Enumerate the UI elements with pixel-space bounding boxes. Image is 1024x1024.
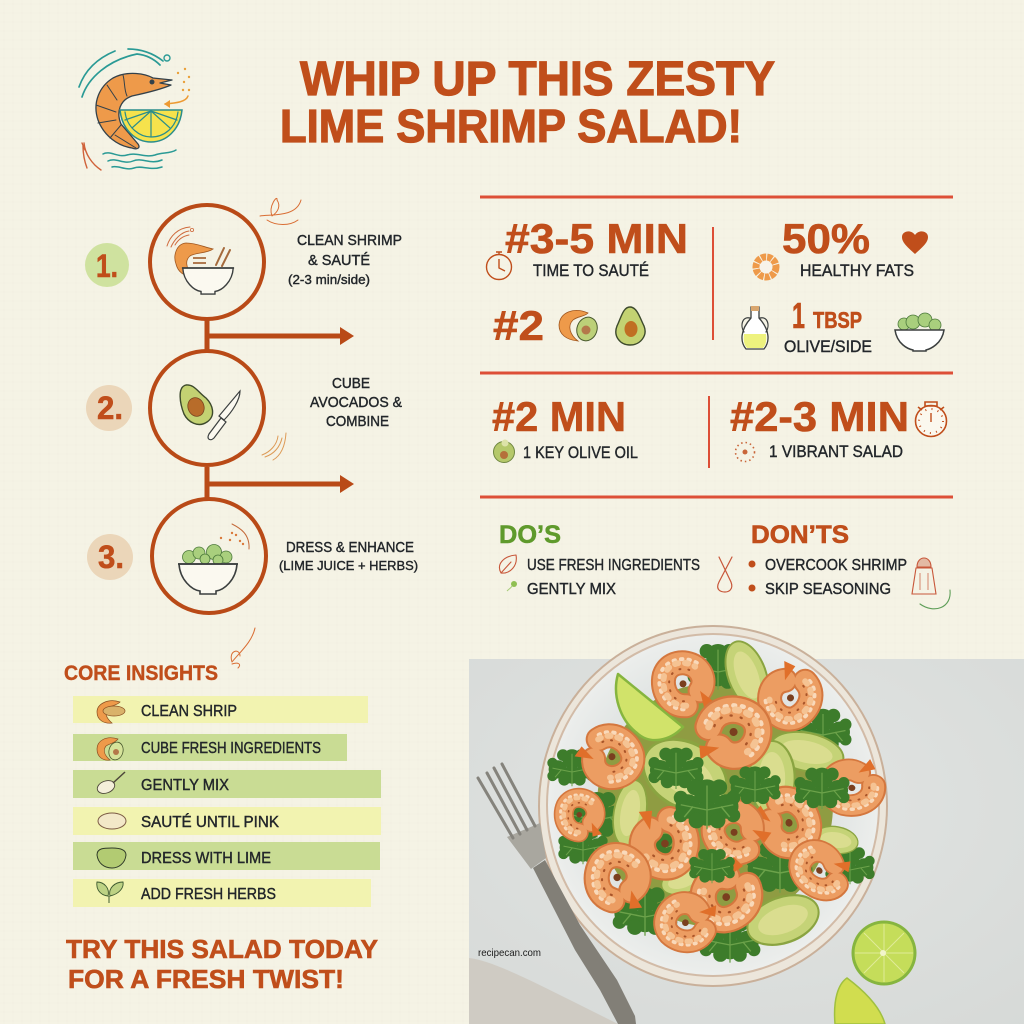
step 3 text: DRESS & ENHANCE xyxy=(286,540,414,556)
stat: 2-3 min: 1 VIBRANT SALAD xyxy=(769,442,903,461)
heading: core insights: CORE INSIGHTS xyxy=(64,662,218,685)
step 1 text: CLEAN SHRIMP xyxy=(297,233,402,249)
insight: dress with lime: DRESS WITH LIME xyxy=(141,850,271,867)
insight: saute until pink: SAUTÉ UNTIL PINK xyxy=(141,814,280,831)
photo: bowl xyxy=(538,625,888,987)
don'ts: OVERCOOK SHRIMP xyxy=(765,557,907,574)
step 3 text xyxy=(279,540,418,573)
icon: avocado xyxy=(494,440,514,462)
badge 2 xyxy=(86,385,132,431)
badge 1: 1. xyxy=(96,248,118,284)
core insights doodle xyxy=(231,628,255,668)
photo: shrimp xyxy=(554,655,882,956)
do's xyxy=(499,521,700,598)
icon: stopwatch xyxy=(916,402,946,436)
icon: shrimp and avocado xyxy=(559,310,601,344)
step 3 xyxy=(87,499,418,613)
icon: leaf xyxy=(499,555,516,573)
don'ts xyxy=(718,521,950,609)
photo: lime wedge xyxy=(616,674,683,740)
photo: avocado slices xyxy=(607,634,861,956)
step 3 text: (LIME JUICE + HERBS) xyxy=(279,558,418,573)
stat: 2-3 min: #2-3 MIN xyxy=(730,393,909,440)
step 2 text: CUBE xyxy=(332,376,370,392)
stat: 1 tbsp olive: TBSP xyxy=(813,307,862,333)
insight: add fresh herbs xyxy=(73,879,371,907)
photo: towel xyxy=(469,958,618,1024)
badge 3 xyxy=(87,534,133,580)
badge 1 xyxy=(85,243,129,287)
stat: 2 min: #2 MIN xyxy=(492,393,626,440)
step 1 xyxy=(85,198,402,319)
photo: shrimp salad bowl xyxy=(469,625,1024,1024)
stat: 1 tbsp olive: 1 xyxy=(792,295,805,336)
icon: avocado xyxy=(616,307,645,345)
icon: timer xyxy=(486,252,512,280)
insight: gently mix xyxy=(73,770,381,798)
title xyxy=(280,53,775,152)
call to action: TRY THIS SALAD TODAY xyxy=(66,934,378,964)
call to action: FOR A FRESH TWIST! xyxy=(68,964,344,994)
do's: DO’S xyxy=(499,521,561,549)
photo: herbs underlay xyxy=(547,644,875,963)
step 1 text: (2-3 min/side) xyxy=(288,272,370,287)
stat: 3-5 min: TIME TO SAUTÉ xyxy=(533,261,649,280)
stat: 1 tbsp olive: OLIVE/SIDE xyxy=(784,337,872,356)
photo: fork xyxy=(478,764,636,1024)
icon: salad bowl xyxy=(895,313,944,351)
icon: ribbon xyxy=(718,557,732,592)
stat: 50% healthy fats xyxy=(756,215,928,280)
stat: 2-3 min xyxy=(730,393,946,462)
icon: oil bottle xyxy=(742,306,768,349)
step 2 text xyxy=(310,376,402,430)
insight: dress with lime xyxy=(73,842,380,870)
insight: cube fresh ingredients: CUBE FRESH INGREDIENTS xyxy=(141,740,321,757)
photo: cilantro xyxy=(648,748,850,883)
do's: USE FRESH INGREDIENTS xyxy=(527,557,700,574)
icon: heart xyxy=(902,231,928,254)
step 2 text: AVOCADOS & xyxy=(310,395,402,411)
step 1 text xyxy=(288,233,402,287)
insight: saute until pink xyxy=(73,807,381,835)
photo: table xyxy=(469,659,1024,1024)
step connectors and arrows xyxy=(207,319,354,499)
insight: gently mix: GENTLY MIX xyxy=(141,777,230,794)
stat: 3-5 min xyxy=(486,215,688,280)
stat: 2 min: 1 KEY OLIVE OIL xyxy=(523,443,638,462)
icon: salt shaker xyxy=(912,558,936,594)
icon: green dot xyxy=(507,581,517,591)
panel: stats rules xyxy=(480,197,953,497)
photo: lime wedge bottom xyxy=(835,978,885,1024)
icon: swirl xyxy=(920,590,950,609)
stat: #2: #2 xyxy=(493,302,544,349)
icon: shrimp xyxy=(756,257,776,277)
insight: clean shrip: CLEAN SHRIP xyxy=(141,703,237,720)
stat: #2 xyxy=(493,302,645,349)
do's: GENTLY MIX xyxy=(527,581,616,598)
insight: cube fresh ingredients xyxy=(73,734,347,762)
step 1 text: & SAUTÉ xyxy=(308,252,370,269)
step 2 text: COMBINE xyxy=(326,414,389,430)
photo: lime half xyxy=(852,920,916,986)
stat: 3-5 min: #3-5 MIN xyxy=(505,215,688,262)
title: WHIP UP THIS ZESTY xyxy=(300,53,775,106)
step 2 xyxy=(86,351,402,465)
call to action xyxy=(66,934,378,994)
don'ts: SKIP SEASONING xyxy=(765,581,891,598)
icon: dotted sun xyxy=(736,442,754,462)
badge 2: 2. xyxy=(97,390,123,426)
insight: add fresh herbs: ADD FRESH HERBS xyxy=(141,886,276,903)
don'ts: DON’TS xyxy=(751,521,849,549)
watermark: recipecan.com xyxy=(478,948,541,959)
stat: 2 min xyxy=(492,393,638,462)
badge 3: 3. xyxy=(98,539,124,575)
insight: clean shrip xyxy=(73,696,368,723)
title: LIME SHRIMP SALAD! xyxy=(280,100,742,152)
icon: shrimp and lemon logo xyxy=(79,49,190,170)
stat: 1 tbsp olive xyxy=(742,295,944,356)
stat: 50% healthy fats: HEALTHY FATS xyxy=(800,261,914,280)
stat: 50% healthy fats: 50% xyxy=(782,215,870,262)
